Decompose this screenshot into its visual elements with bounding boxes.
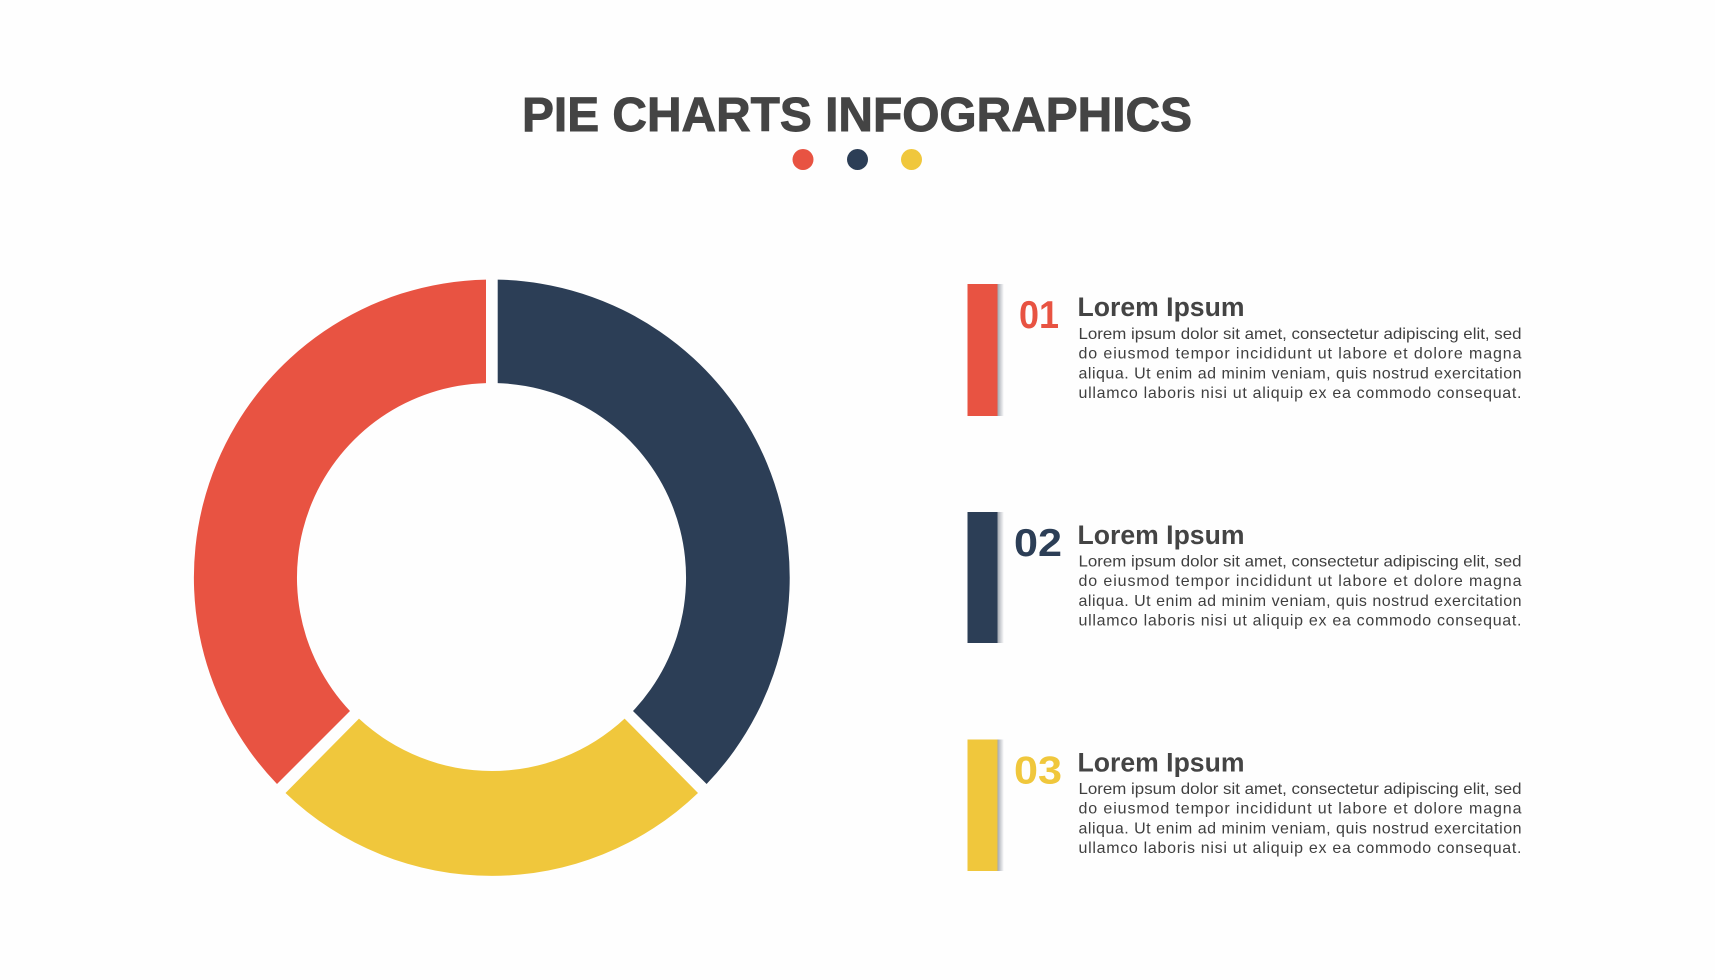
- body 02: ullamco laboris nisi ut aliquip ex ea commodo consequat.: [1078, 612, 1522, 630]
- body 03: Lorem ipsum dolor sit amet, consectetur adipiscing elit, sed: [1078, 781, 1522, 798]
- bar 02: [968, 512, 1004, 643]
- body 01: ullamco laboris nisi ut aliquip ex ea commodo consequat.: [1078, 385, 1522, 402]
- body 03: aliqua. Ut enim ad minim veniam, quis nostrud exercitation: [1078, 820, 1522, 837]
- body 02: Lorem ipsum dolor sit amet, consectetur adipiscing elit, sed: [1078, 554, 1522, 570]
- body 03: ullamco laboris nisi ut aliquip ex ea commodo consequat.: [1078, 840, 1522, 857]
- item 02: [968, 512, 1522, 643]
- number 03: 03: [1014, 750, 1062, 792]
- segment: yellow: [286, 719, 698, 876]
- bar 03: [968, 740, 1004, 871]
- heading 01: Lorem Ipsum: [1078, 292, 1244, 322]
- donut chart: [194, 280, 790, 876]
- body 03: [1078, 781, 1522, 857]
- decorative title dots: [792, 149, 922, 170]
- body 01: do eiusmod tempor incididunt ut labore et dolore magna: [1078, 346, 1522, 363]
- number 01: 01: [1019, 294, 1059, 337]
- heading 02: Lorem Ipsum: [1078, 520, 1244, 550]
- body 01: Lorem ipsum dolor sit amet, consectetur adipiscing elit, sed: [1078, 326, 1522, 343]
- item 03: [968, 740, 1522, 871]
- body 01: [1078, 326, 1522, 402]
- bar 01: [968, 284, 1004, 416]
- segment: navy: [498, 280, 790, 784]
- body 02: do eiusmod tempor incididunt ut labore et dolore magna: [1078, 573, 1522, 590]
- title: PIE CHARTS INFOGRAPHICS: [522, 89, 1192, 142]
- item 01: [968, 284, 1522, 416]
- body 02: [1078, 554, 1522, 630]
- heading 03: Lorem Ipsum: [1078, 748, 1244, 778]
- body 03: do eiusmod tempor incididunt ut labore et dolore magna: [1078, 801, 1522, 818]
- segment: red: [194, 280, 486, 784]
- number 02: 02: [1014, 522, 1062, 565]
- body 02: aliqua. Ut enim ad minim veniam, quis nostrud exercitation: [1078, 593, 1522, 610]
- body 01: aliqua. Ut enim ad minim veniam, quis nostrud exercitation: [1078, 365, 1522, 382]
